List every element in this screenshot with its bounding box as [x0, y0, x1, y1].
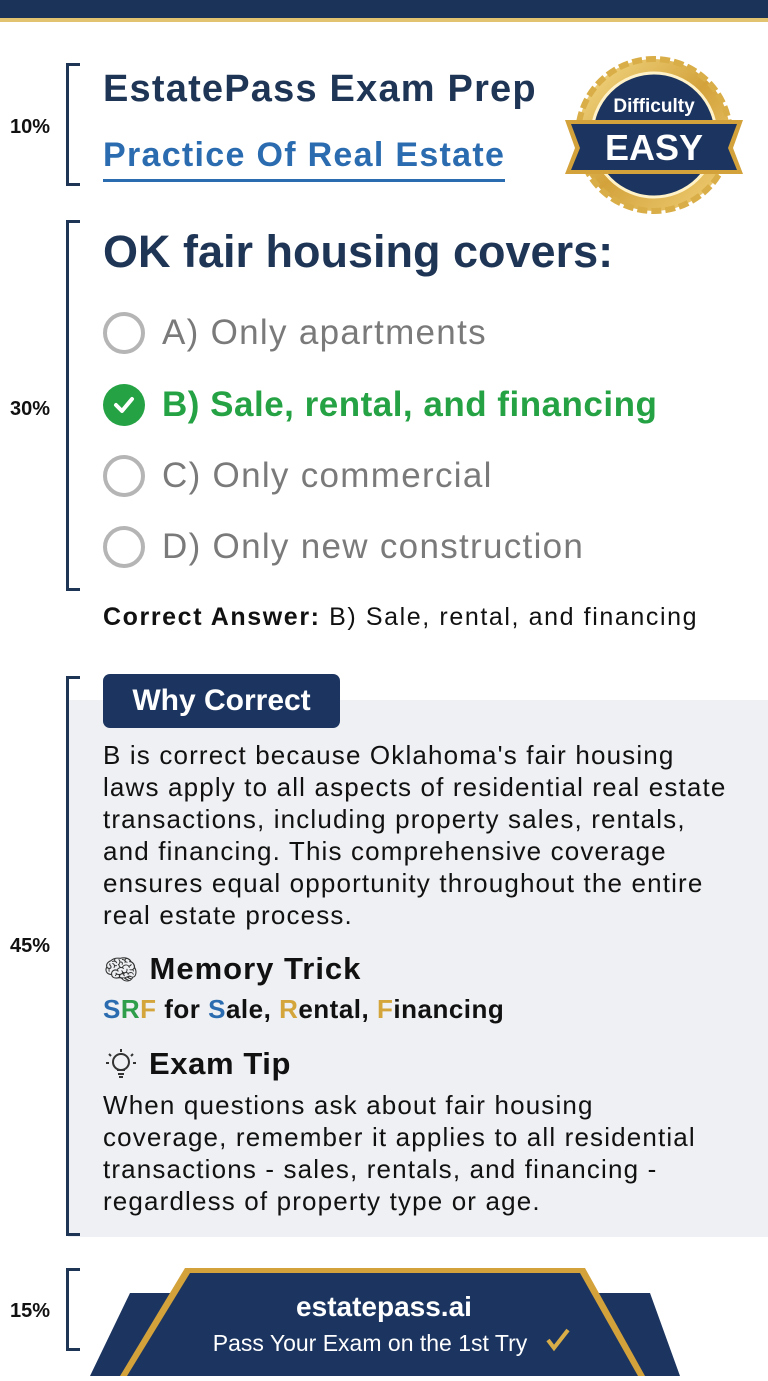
- explanation text: laws apply to all aspects of residential real estate: [103, 772, 726, 802]
- question: OK fair housing covers:: [103, 226, 613, 277]
- label: 30%: 30%: [10, 398, 50, 420]
- option A: A) Only apartments: [162, 313, 487, 352]
- option C: C) Only commercial: [162, 456, 493, 495]
- explanation text: transactions, including property sales, rentals,: [103, 804, 686, 834]
- option D: D) Only new construction: [162, 527, 584, 566]
- panel: explanation: [68, 700, 768, 1237]
- correct answer: Correct Answer: B) Sale, rental, and financing: [103, 603, 698, 631]
- exam tip heading: Exam Tip: [149, 1046, 291, 1081]
- exam tip text: [103, 1090, 696, 1216]
- label: 15%: 15%: [10, 1300, 50, 1322]
- badge: why correct: [103, 674, 340, 728]
- subtitle: Practice Of Real Estate: [103, 136, 505, 174]
- explanation text: [103, 740, 726, 930]
- explanation text: real estate process.: [103, 900, 353, 930]
- bracket: explanation: [66, 676, 80, 1236]
- explanation text: B is correct because Oklahoma's fair housing: [103, 740, 674, 770]
- badge: difficulty: EASY: [605, 127, 703, 168]
- exam tip text: transactions - sales, rentals, and financing -: [103, 1154, 657, 1184]
- memory trick heading: 🧠︎: [103, 954, 140, 984]
- exam tip text: coverage, remember it applies to all residential: [103, 1122, 696, 1152]
- title: EstatePass Exam Prep: [103, 68, 537, 110]
- memory trick heading: Memory Trick: [150, 951, 361, 986]
- top bar: [0, 0, 768, 22]
- footer banner: estatepass.ai: [296, 1291, 472, 1322]
- footer banner: Pass Your Exam on the 1st Try: [213, 1330, 528, 1356]
- bracket: question: [66, 220, 80, 591]
- label: 10%: 10%: [10, 116, 50, 138]
- explanation text: ensures equal opportunity throughout the entire: [103, 868, 703, 898]
- label: 45%: 45%: [10, 935, 50, 957]
- badge: why correct: Why Correct: [132, 684, 311, 717]
- footer banner: [90, 1268, 680, 1376]
- explanation text: and financing. This comprehensive coverage: [103, 836, 667, 866]
- bracket: footer: [66, 1268, 80, 1351]
- exam tip text: When questions ask about fair housing: [103, 1090, 594, 1120]
- badge: difficulty: [565, 56, 743, 214]
- option B (correct): B) Sale, rental, and financing: [162, 385, 657, 424]
- memory trick text: SRF for Sale, Rental, Financing: [103, 994, 504, 1024]
- exam tip text: regardless of property type or age.: [103, 1186, 541, 1216]
- badge: difficulty: Difficulty: [613, 96, 695, 117]
- bracket: header: [66, 63, 80, 186]
